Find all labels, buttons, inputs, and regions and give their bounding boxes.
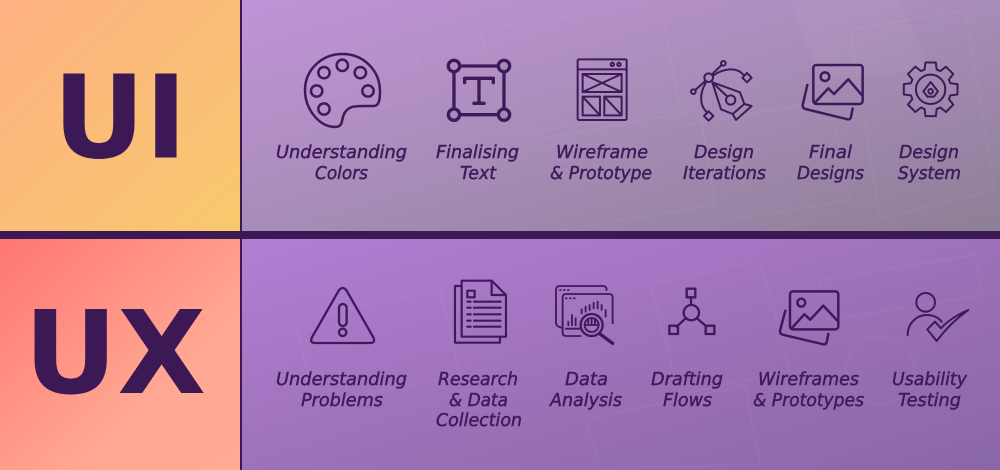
divider: horizontal bar [0,231,1000,239]
label: Design System [898,143,961,184]
item: Design Iterations [683,61,766,184]
label: Drafting Flows: Drafting [651,370,723,390]
item: Finalising Text [436,60,519,184]
label: Understanding Problems [276,370,407,411]
label: Drafting Flows: Flows [663,391,712,411]
item: Research & Data Collection [436,281,522,431]
label: Final Designs [797,143,864,184]
panel: UI steps background [242,0,1000,231]
item: Drafting Flows [651,289,723,411]
icon: pen tool [691,61,752,121]
heading: UI: UI [53,52,187,186]
icon: documents [455,281,506,343]
icon: text box [448,60,510,120]
label: Final Designs: Designs [797,164,864,184]
item: Final Designs [797,65,864,184]
item: Understanding Colors [276,54,407,184]
item: Wireframe & Prototype [550,59,652,184]
item: Wireframes & Prototypes [753,291,864,411]
label: Drafting Flows [651,370,723,411]
label: Finalising Text [436,143,519,184]
icon: user with check mark [908,293,968,341]
icon: wireframe [578,59,627,120]
label: Data Analysis: Analysis [549,391,622,411]
label: Design Iterations: Iterations [683,164,766,184]
label: Usability Testing [892,370,968,411]
panel: UX steps background [242,239,1000,470]
label: Wireframe & Prototype: & Prototype [550,164,652,184]
label: Wireframe & Prototype [550,143,652,184]
label: Research & Data Collection: Research [438,370,518,390]
label: Finalising Text: Text [460,164,497,184]
icon: data analysis windows [556,286,613,343]
label: Wireframes & Prototypes: & Prototypes [753,391,864,411]
panel: UX label background [0,239,240,470]
label: Research & Data Collection [436,370,522,431]
label: Usability Testing: Testing [898,391,961,411]
label: Finalising Text: Finalising [436,143,519,163]
icon: warning triangle [311,288,374,343]
label: Wireframe & Prototype: Wireframe [556,143,648,163]
label: Design System: Design [899,143,959,163]
icon: gear with pen nib [904,62,957,116]
heading: UX: UX [24,287,206,421]
label: Understanding Colors: Colors [315,164,368,184]
icon: flow nodes [669,289,714,334]
item: Usability Testing [892,293,968,411]
label: Usability Testing: Usability [892,370,968,390]
icon: image stack [780,291,838,344]
label: Data Analysis [549,370,622,411]
icon: image stack [803,65,863,119]
label: Understanding Problems: Problems [301,391,383,411]
label: Design Iterations: Design [694,143,754,163]
icon: palette [305,54,380,127]
item: Design System [898,62,961,184]
item: Data Analysis [549,286,622,411]
label: Data Analysis: Data [565,370,608,390]
label: Design System: System [898,164,961,184]
label: Design Iterations [683,143,766,184]
label: Final Designs: Final [809,143,852,163]
label: Wireframes & Prototypes: Wireframes [758,370,859,390]
label: Understanding Colors: Understanding [276,143,407,163]
panel: UI label background [0,0,240,231]
label: Wireframes & Prototypes [753,370,864,411]
label: Research & Data Collection: & Data [449,391,508,411]
label: Understanding Problems: Understanding [276,370,407,390]
label: Research & Data Collection: Collection [436,411,522,431]
item: Understanding Problems [276,288,407,411]
label: Understanding Colors [276,143,407,184]
divider: vertical bar [240,0,242,470]
